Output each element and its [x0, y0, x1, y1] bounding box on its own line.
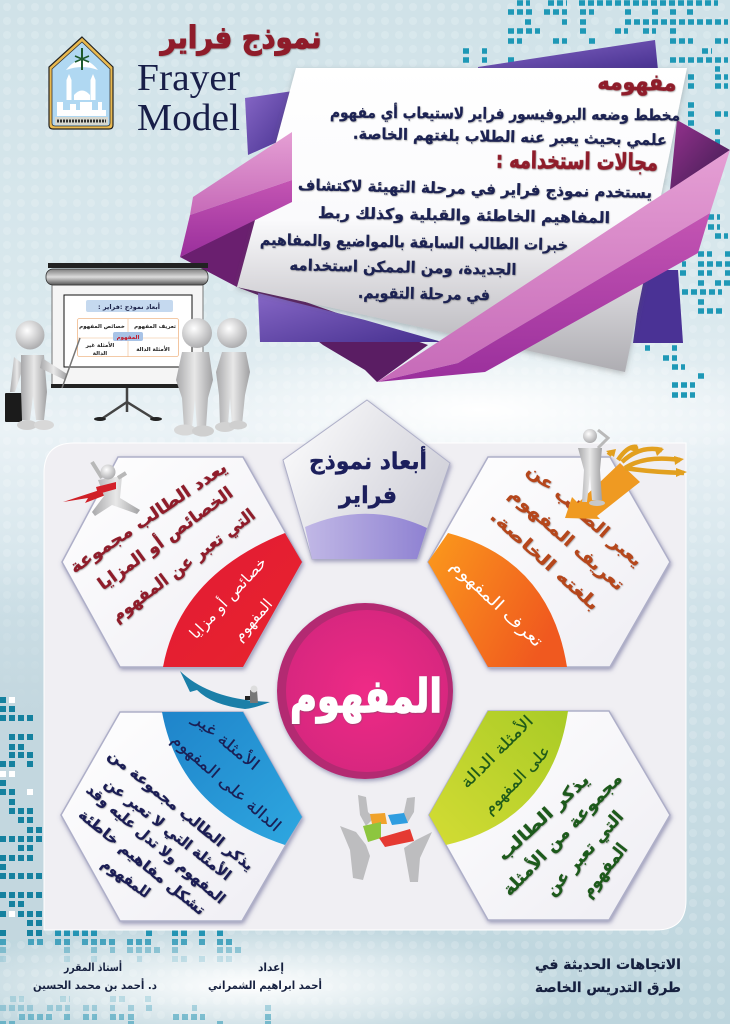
heading text: أبعاد نموذج	[309, 445, 427, 475]
slide: الأمثلة غير	[85, 341, 114, 349]
ribbon backing shapes	[180, 40, 730, 382]
body: concept text: مخطط وضعه البروفيسور فراير لاستيعاب أي مفهوم	[330, 102, 680, 126]
text: الخصائص أو المزايا	[93, 481, 237, 595]
body: areas of use text: في مرحلة التقويم.	[358, 284, 490, 305]
centre circle: concept	[277, 603, 453, 779]
footer: course instructor: د. أحمد بن محمد الحسين	[33, 978, 157, 992]
icon: man on branching arrow	[565, 429, 687, 519]
heading: areas of use: مجالات استخدامه :	[496, 148, 658, 176]
body: areas of use text: الجديدة، ومن الممكن استخدامه	[289, 256, 517, 279]
hexagon: characteristics	[62, 457, 302, 667]
hexagon: definition	[428, 457, 670, 667]
text: تشكل مفاهيم خاطئة	[75, 807, 208, 919]
title: Frayer: Frayer	[137, 57, 240, 99]
label: الدالة على المفهوم	[167, 730, 285, 836]
pixel squares: left strip	[0, 700, 42, 933]
text: يذكر الطالب	[494, 770, 594, 865]
heading text	[309, 445, 427, 509]
pixel squares: bottom strip	[0, 933, 272, 1024]
slide: الدالة	[93, 351, 107, 357]
text	[486, 460, 646, 615]
body: areas of use text: المفاهيم الخاطئة والقبلية وكذلك ربط	[318, 204, 610, 227]
text: تعريف المفهوم	[505, 484, 628, 595]
text	[66, 458, 260, 626]
icon: runner breaking tape	[63, 462, 140, 516]
title: Arabic: نموذج فراير	[159, 20, 322, 56]
lavender band	[305, 514, 427, 559]
footer: course	[535, 957, 681, 996]
ribbon: right band	[377, 150, 730, 382]
ribbon: left fold	[180, 132, 292, 257]
text: للمفهوم	[98, 856, 153, 902]
footer: course instructor	[33, 960, 157, 992]
text: الأمثلة التي لا تعبر عن	[101, 774, 235, 884]
label	[167, 708, 285, 836]
body: concept text: علمي بحيث يعبر عنه الطلاب بلغتهم الخاصة.	[353, 125, 667, 150]
text	[75, 747, 256, 919]
footer: prepared by	[208, 961, 322, 992]
body: areas of use text: خبرات الطالب السابقة بالمواضيع والمفاهيم	[260, 231, 568, 254]
heading text: فراير	[338, 483, 397, 509]
colour band: red	[163, 533, 302, 667]
heading: concept: مفهومه	[597, 69, 677, 97]
label: الأمثلة الدالة	[456, 711, 537, 792]
slide	[64, 295, 192, 367]
label: خصائص أو مزايا	[185, 553, 270, 643]
slide: المفهوم	[117, 335, 139, 341]
icon: blue arrow with walking man	[180, 671, 270, 709]
colour band: blue	[162, 712, 302, 845]
label: المفهوم	[230, 595, 276, 645]
label	[456, 711, 555, 819]
text: المفهوم ولا تدل عليه وقد	[83, 782, 228, 907]
text: التي تعبر عن المفهوم	[108, 505, 260, 626]
hexagon: non-examples	[61, 708, 302, 921]
text: يذكر الطالب مجموعة من	[105, 747, 256, 874]
label: تعرف المفهوم	[446, 556, 547, 652]
label: الأمثلة غير	[188, 708, 264, 775]
colour band: orange	[428, 533, 567, 667]
label: على المفهوم	[479, 741, 555, 819]
figure: two onlookers	[174, 318, 250, 436]
icon: team holding puzzle pieces	[340, 795, 432, 882]
title: Model: Model	[137, 97, 240, 139]
slide: تعريف المفهوم	[134, 324, 176, 330]
text: يعدد الطالب مجموعة	[66, 458, 231, 578]
hexagon: examples	[429, 711, 670, 920]
logo: university crest	[49, 37, 113, 129]
text: يعبر الطالب عن	[523, 460, 646, 571]
text: التي تعبر عن	[542, 807, 628, 900]
body: concept text	[330, 102, 680, 150]
pixel squares: top right	[463, 3, 730, 395]
text: المفهوم	[578, 840, 632, 902]
panel: concept card	[180, 68, 730, 382]
slide: أبعاد نموذج :فراير :	[98, 302, 160, 311]
text: بلغته الخاصة.	[486, 506, 603, 615]
footer: prepared by: أحمد ابراهيم الشمراني	[208, 978, 322, 992]
footer: course instructor: أستاذ المقرر	[63, 960, 122, 974]
colour band: green	[429, 711, 568, 845]
panel: model diagram	[44, 443, 686, 930]
footer: course: طرق التدريس الخاصة	[535, 980, 681, 996]
body: areas of use text	[260, 176, 652, 305]
figure: presenter with briefcase	[5, 320, 80, 430]
slide: خصائص المفهوم	[79, 324, 125, 330]
footer: prepared by: إعداد	[258, 961, 284, 974]
body: areas of use text: يستخدم نموذج فراير في مرحلة التهيئة لاكتشاف	[298, 176, 652, 203]
footer: course: الاتجاهات الحديثة في	[535, 957, 681, 973]
centre circle: concept: المفهوم	[290, 669, 442, 723]
pentagon: heading	[283, 400, 450, 559]
slide: الأمثلة الدالة	[136, 345, 170, 353]
presentation board	[46, 263, 208, 421]
text: مجموعة من الأمثلة	[498, 768, 627, 900]
